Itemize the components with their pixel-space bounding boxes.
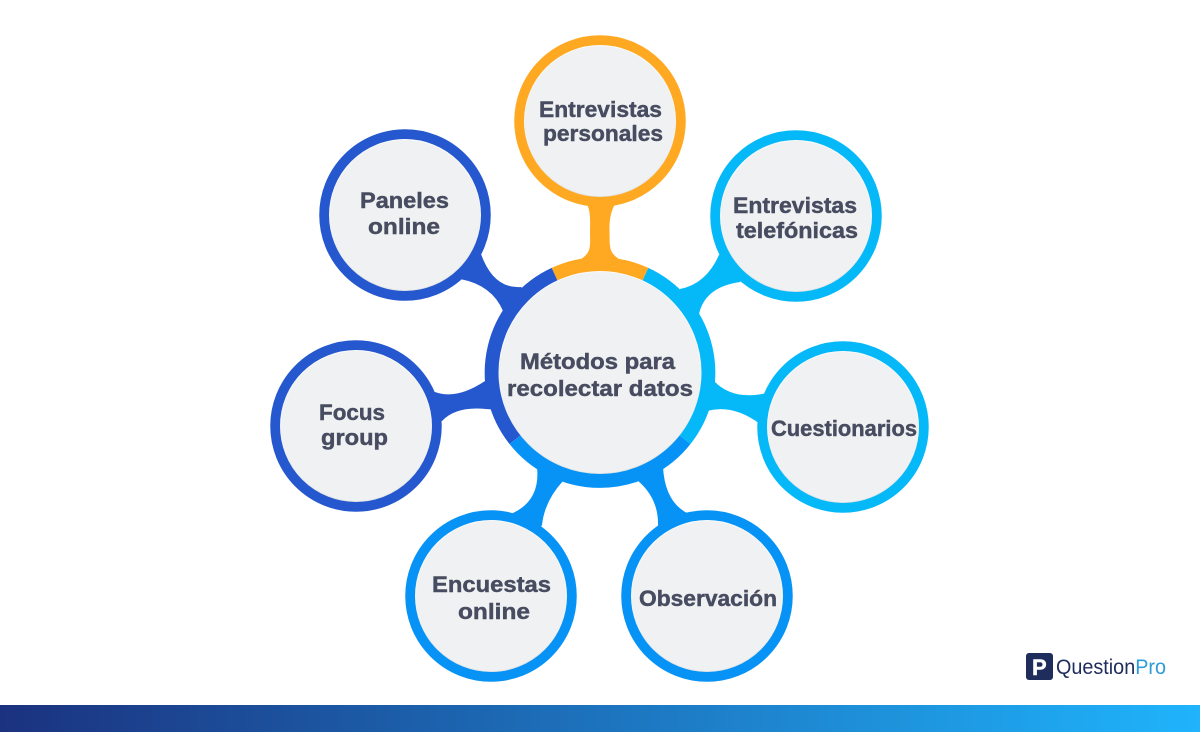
node: Cuestionarios: Cuestionarios — [771, 416, 917, 441]
node: Focus group — [276, 346, 500, 506]
node: Paneles online: online — [368, 214, 440, 239]
node: Focus group: group — [321, 425, 388, 450]
logo wordmark: QuestionPro — [1056, 656, 1166, 679]
hub ring: light blue segment — [645, 274, 708, 440]
hub ring: dark blue segment — [492, 274, 555, 440]
node: Entrevistas personales — [520, 40, 680, 275]
node: Encuestas online — [410, 460, 572, 676]
hub disk — [499, 272, 701, 474]
hub ring: orange segment — [555, 265, 645, 274]
logo icon: P — [1032, 655, 1047, 680]
node: Paneles online: Paneles — [360, 188, 449, 213]
node: Focus group: Focus — [319, 400, 385, 425]
node: Observación — [626, 460, 788, 676]
node: Entrevistas telefónicas — [670, 136, 876, 320]
node: Paneles online — [324, 134, 530, 320]
hub ring: mid blue segment — [515, 440, 685, 481]
node: Entrevistas telefónicas: Entrevistas — [733, 193, 857, 218]
node: Entrevistas telefónicas: telefónicas — [736, 218, 858, 243]
hub title: Métodos para — [520, 349, 676, 374]
node: Entrevistas personales: personales — [543, 121, 663, 146]
hub title: recolectar datos — [507, 376, 693, 401]
node: Observación: Observación — [639, 586, 777, 611]
hub title — [507, 349, 693, 401]
node: Encuestas online: online — [458, 599, 530, 624]
central hub: Métodos para recolectar datos — [492, 265, 708, 481]
node: Cuestionarios — [695, 346, 924, 508]
node: Encuestas online: Encuestas — [432, 572, 551, 597]
node: Entrevistas personales: Entrevistas — [539, 97, 662, 122]
footer gradient bar — [0, 705, 1200, 732]
logo: QuestionPro — [1026, 653, 1166, 680]
